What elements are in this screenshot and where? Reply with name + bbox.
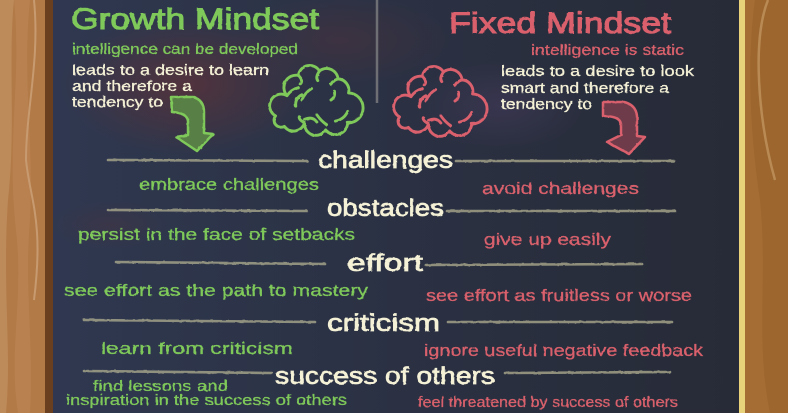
fixed lead text: tendency to [501,96,592,113]
row: challenges [108,147,674,198]
fixed definition: intelligence is static [531,42,685,59]
row: criticism: criticism [327,310,440,337]
fixed lead text [501,63,695,113]
fixed lead text: smart and therefore a [501,80,670,97]
icon: pink brain [394,66,487,136]
growth definition: intelligence can be developed [72,41,298,58]
left wood frame [0,0,56,413]
row: success of others: find lessons and [93,378,228,395]
row: obstacles [78,195,675,249]
row: effort: see effort as fruitless or worse [426,286,692,305]
growth lead text [72,62,269,111]
row: obstacles: give up easily [484,230,612,249]
row: effort: see effort as the path to mastery [64,281,369,300]
row: success of others [66,363,678,411]
growth lead text: and therefore a [72,78,193,95]
icon: pink arrow [603,102,645,154]
row: success of others: success of others [275,363,495,390]
row: challenges: avoid challenges [482,179,639,198]
row: obstacles: persist in the face of setbacks [78,225,355,244]
row: criticism: ignore useful negative feedback [424,341,704,360]
growth lead text: tendency to [72,94,163,111]
center divider [376,0,378,103]
fixed lead text: leads to a desire to look [501,63,695,80]
row: obstacles: obstacles [327,195,444,222]
heading: fixed mindset: Fixed Mindset [449,7,672,40]
row: success of others: inspiration in the success of others [66,392,347,409]
icon: green brain [270,65,363,135]
row: challenges: embrace challenges [139,175,319,194]
row: criticism: learn from criticism [101,339,293,358]
row: effort: effort [347,250,423,277]
growth lead text: leads to a desire to learn [72,62,269,79]
row: effort [64,250,692,305]
row: criticism [84,310,704,360]
row: challenges: challenges [318,147,453,174]
heading: growth mindset: Growth Mindset [71,3,320,36]
right wood frame [738,0,788,413]
icon: green arrow [171,97,213,151]
row: success of others: feel threatened by success of others [418,394,678,411]
